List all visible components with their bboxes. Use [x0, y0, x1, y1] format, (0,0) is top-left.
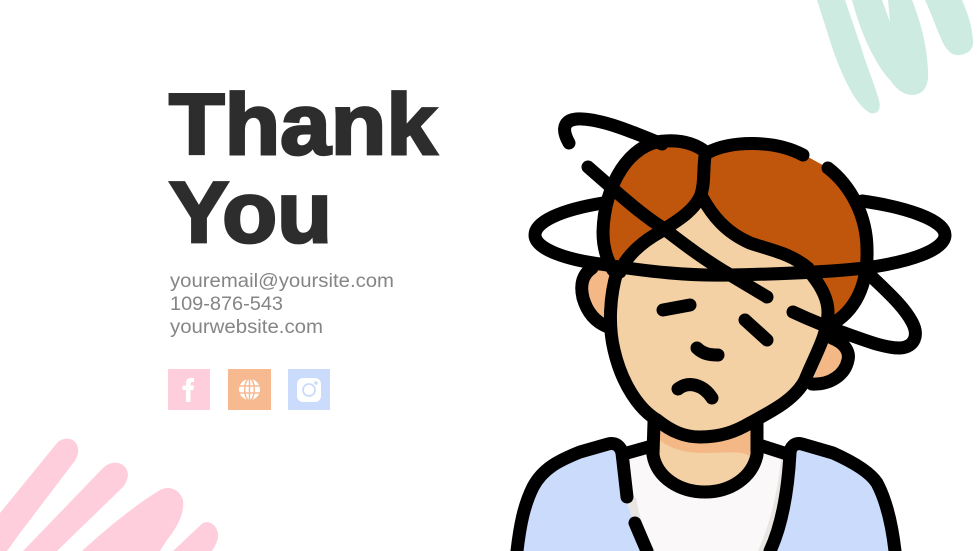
contact details: youremail@yoursite.com — [170, 271, 394, 292]
hair right side — [828, 168, 867, 325]
hair outline — [603, 141, 707, 270]
face outline — [610, 272, 828, 437]
hair — [603, 141, 867, 325]
face — [609, 190, 828, 437]
icon: globe — [228, 369, 271, 410]
decorative pink brush strokes — [0, 439, 218, 551]
contact details — [170, 271, 394, 338]
collar left — [627, 446, 652, 453]
orbit: diagonal — [588, 167, 767, 297]
hair parting — [620, 156, 705, 272]
collar right — [762, 446, 787, 454]
right ear outline — [812, 338, 848, 384]
fringe — [702, 197, 808, 268]
orbit: horizontal ring — [535, 201, 945, 275]
left shoulder — [517, 444, 627, 551]
title: You — [169, 165, 332, 261]
contact details: yourwebsite.com — [170, 317, 323, 338]
outlines — [517, 119, 945, 551]
nose — [697, 348, 718, 355]
left lapel lower — [635, 523, 647, 551]
orbit: top arc — [565, 119, 662, 144]
mouth — [678, 385, 712, 398]
hair top right — [707, 143, 803, 155]
forehead shadow — [628, 190, 812, 272]
decorative mint brush strokes — [817, 0, 973, 113]
title: Thank — [169, 77, 437, 173]
contact details: 109-876-543 — [170, 294, 283, 315]
ears — [583, 270, 848, 385]
eyes — [663, 305, 690, 310]
right shoulder — [770, 444, 895, 551]
neck outline — [653, 422, 757, 492]
icon: facebook — [168, 369, 210, 410]
body fills — [517, 425, 895, 551]
orbit: right loop — [793, 275, 915, 348]
illustration: dizzy boy — [517, 119, 945, 551]
icon: instagram — [288, 369, 330, 410]
left ear outline — [582, 268, 608, 327]
title — [169, 77, 437, 261]
